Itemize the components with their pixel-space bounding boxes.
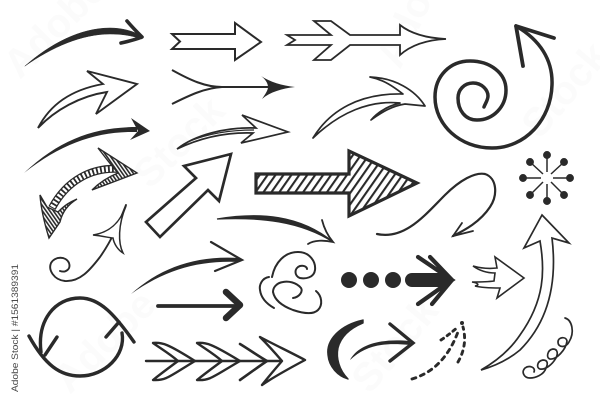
arrow: S curve [377,174,495,236]
arrow: swoosh outlined [313,77,425,138]
arrow: long curved outlined [481,215,569,370]
arrow: outlined curved row 2 left [38,71,137,128]
arrow: crescent with curved arrow [328,320,413,379]
arrow: thin curved top [217,216,333,244]
arrow: outlined notched [172,23,261,60]
icon: cloud swirls [260,252,321,313]
arrow: spiral [435,26,554,148]
side credit text: Adobe Stock | #1561389391 [10,264,21,392]
arrow: thick swoosh top-left [25,21,142,66]
icon: spring curl [523,318,572,378]
arrow: hatched double-headed curved [40,148,137,238]
icon: circular arrows [29,298,134,376]
arrow: big hatched [256,151,417,216]
watermark: Stock [343,288,447,401]
icon: burst of dots [520,152,573,204]
arrow: big outlined pointing up-right [146,154,231,237]
arrow: feathered outline [287,21,446,60]
arrow: spiral-tail small [50,205,126,281]
arrow: dotted with double head [341,257,454,304]
arrow: forked tail [172,70,295,104]
arrow: curved open head [131,242,242,294]
arrow: flame tail outlined [472,257,524,298]
watermark: Adobe [45,282,164,401]
arrow: straight bold [158,292,240,318]
arrow: slim outlined [177,115,288,149]
arrow: dashed [412,321,465,379]
arrow: swoosh row 3 left [24,118,150,173]
arrow: chevrons [146,337,305,385]
watermark: Stock [125,88,234,196]
